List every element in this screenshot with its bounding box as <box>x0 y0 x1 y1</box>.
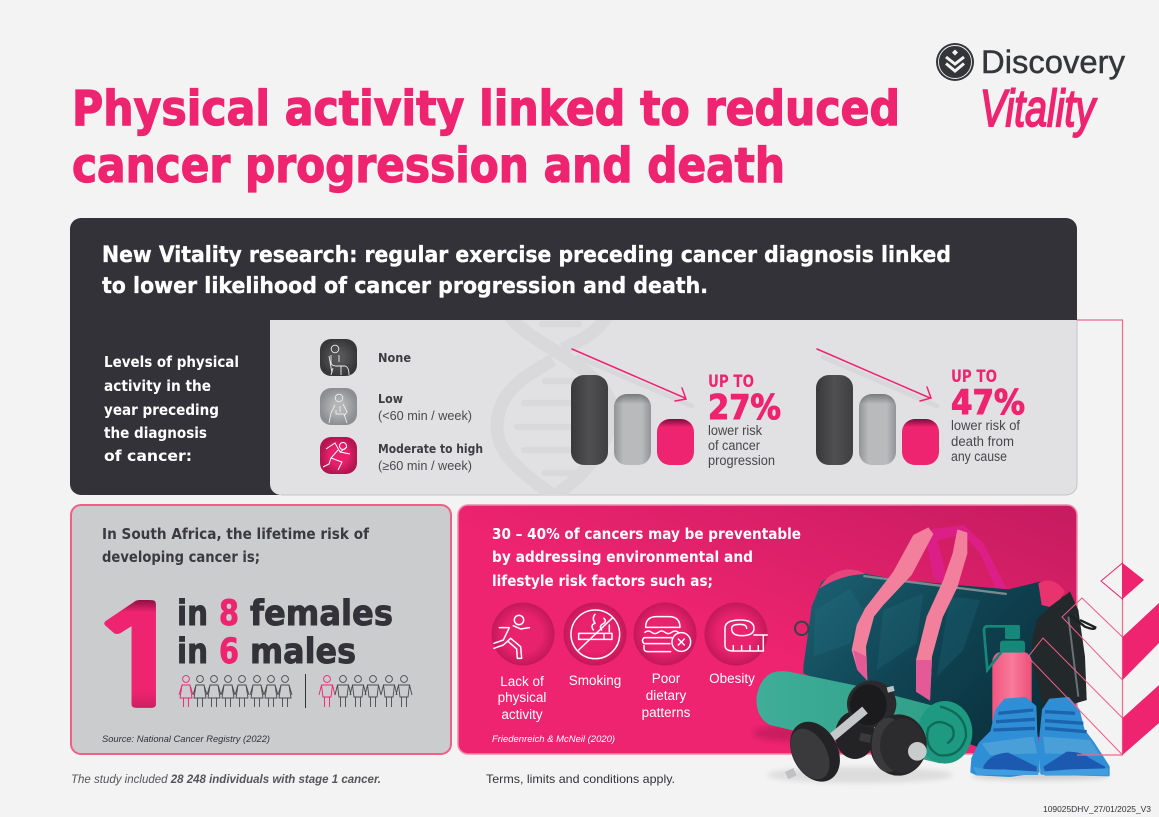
panel: activity chart background <box>270 320 1077 495</box>
stat: 47 percent: UP TO <box>951 367 997 386</box>
legend: activity levels: Low <box>378 392 403 406</box>
icon: poor dietary patterns <box>634 602 696 666</box>
label: lack of physical activity <box>498 674 546 722</box>
panel: preventable risk factors <box>458 505 1077 754</box>
text: preventable cancers: 30 – 40% of cancers may be preventable <box>492 525 801 543</box>
footnote: study size: The study included 28 248 individuals with stage 1 cancer. <box>71 774 381 786</box>
text: preventable cancers <box>492 525 801 590</box>
stat: 27 percent: UP TO <box>708 372 754 391</box>
icon: lack of physical activity <box>492 602 554 666</box>
gym bag <box>795 525 1095 747</box>
stat: 27 percent: progression <box>708 453 775 468</box>
bar chart: cancer progression <box>571 375 694 465</box>
label: smoking: Smoking <box>569 673 621 688</box>
text: preventable cancers: by addressing environmental and <box>492 548 753 566</box>
legend: activity levels: (<60 min / week) <box>378 409 472 423</box>
panel: South Africa lifetime risk <box>71 505 451 754</box>
stat: 47 percent: any cause <box>951 449 1007 464</box>
label: poor dietary patterns: Poor <box>652 671 681 686</box>
stat: 27 percent <box>708 372 781 468</box>
logo: Discovery Vitality: Vitality <box>980 80 1097 138</box>
bar chart: death from any cause <box>816 375 939 465</box>
stat: in 8 females: 8 <box>219 594 239 634</box>
logo: Discovery Vitality <box>936 43 1125 138</box>
icon: DNA helix watermark <box>542 348 578 495</box>
text: levels of physical activity: of cancer: <box>104 447 192 465</box>
stat: in 6 males: 6 <box>219 632 239 672</box>
stat: 27 percent: lower risk <box>708 423 762 438</box>
stat: in 6 males: in <box>177 632 208 672</box>
icon: Discovery emblem <box>936 43 974 81</box>
stat: 47 percent: death from <box>951 434 1014 449</box>
text: lifetime risk intro: developing cancer is; <box>102 548 260 566</box>
text: preventable cancers: lifestyle risk factors such as; <box>492 572 713 590</box>
stat: in 8 females <box>177 594 393 634</box>
legend: activity levels <box>320 339 483 474</box>
legend: activity levels: (≥60 min / week) <box>378 459 472 473</box>
logo: Discovery Vitality: Discovery <box>981 44 1125 80</box>
text: lifetime risk intro: In South Africa, the lifetime risk of <box>102 525 369 543</box>
heading: new research: New Vitality research: regular exercise preceding cancer diagnosis linked <box>102 242 951 268</box>
towel <box>756 671 972 764</box>
stat: in 6 males: males <box>250 632 356 672</box>
icon: person running <box>320 437 357 474</box>
stat: in 6 males <box>177 632 356 672</box>
stat: 27 percent: 27% <box>708 388 781 428</box>
icon: person squatting <box>320 388 357 425</box>
text: levels of physical activity <box>104 353 239 465</box>
icon: seated person <box>320 339 357 376</box>
panel: research summary <box>70 218 1077 497</box>
label: lack of physical activity: activity <box>501 707 543 722</box>
label: lack of physical activity: physical <box>498 690 546 705</box>
legend: activity levels: None <box>378 351 411 365</box>
water bottle <box>984 625 1032 732</box>
citation: Friedenreich & McNeil (2020) <box>492 734 615 745</box>
title <box>72 81 900 194</box>
icon: diamond <box>1101 563 1144 599</box>
dumbbells <box>780 681 927 790</box>
document reference: 109025DHV_27/01/2025_V3 <box>1043 805 1152 814</box>
title: Physical activity linked to reduced <box>72 81 900 137</box>
big number 1: 1 <box>82 590 197 727</box>
heading: new research <box>102 242 951 299</box>
text: levels of physical activity: activity in the <box>104 377 211 395</box>
pictogram: 1 in 6 males <box>319 676 412 707</box>
photo: gym bag, towel, dumbbells, bottle and shoes <box>753 525 1110 790</box>
icon: obesity tape measure <box>704 602 768 666</box>
stat: in 8 females: in <box>177 594 208 634</box>
stat: 47 percent: 47% <box>951 383 1025 423</box>
text: lifetime risk intro <box>102 525 369 566</box>
decorative chevrons <box>1028 320 1159 755</box>
title: cancer progression and death <box>72 138 785 194</box>
heading: new research: to lower likelihood of cancer progression and death. <box>102 273 708 299</box>
label: poor dietary patterns: patterns <box>642 705 691 720</box>
stat: in 8 females: females <box>250 594 393 634</box>
text: levels of physical activity: Levels of physical <box>104 353 239 371</box>
label: obesity: Obesity <box>709 671 755 686</box>
running shoes <box>972 698 1108 776</box>
pictogram: 1 in 8 females <box>179 676 292 707</box>
text: levels of physical activity: the diagnosis <box>104 424 207 442</box>
label: poor dietary patterns <box>642 671 691 720</box>
arrow: progression decline <box>572 349 692 406</box>
footnote: terms: Terms, limits and conditions apply. <box>486 772 675 786</box>
stat: 27 percent: of cancer <box>708 438 760 453</box>
label: poor dietary patterns: dietary <box>646 688 687 703</box>
icon: smoking <box>564 602 626 666</box>
text: levels of physical activity: year preceding <box>104 401 219 419</box>
arrow: death risk decline <box>817 349 937 406</box>
label: lack of physical activity: Lack of <box>500 674 544 689</box>
source note: Source: National Cancer Registry (2022) <box>102 734 270 745</box>
stat: 47 percent <box>951 367 1025 464</box>
stat: 47 percent: lower risk of <box>951 418 1020 433</box>
legend: activity levels: Moderate to high <box>378 442 483 456</box>
